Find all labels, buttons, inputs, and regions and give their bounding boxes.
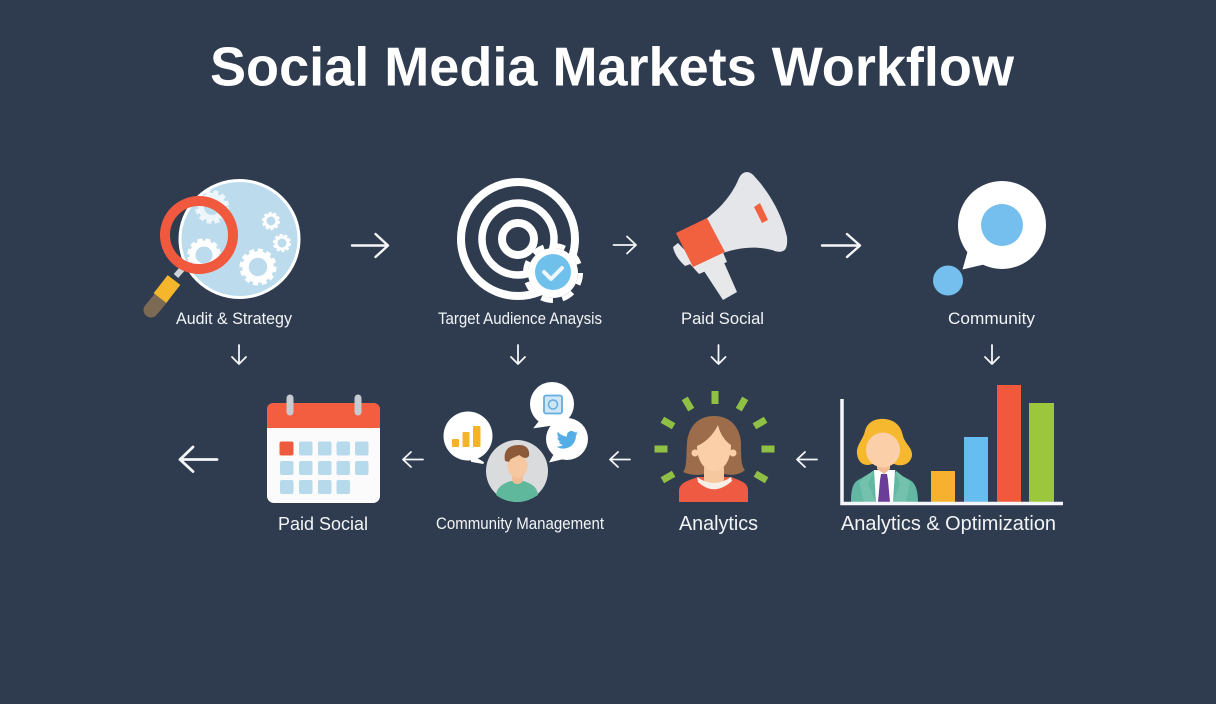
title: Social Media Markets Workflow bbox=[210, 36, 1014, 98]
label: Community bbox=[948, 310, 1036, 328]
label: Paid Social bbox=[681, 310, 764, 328]
icon: magnifying glass bbox=[151, 201, 233, 310]
step: Community bbox=[933, 181, 1046, 328]
arrow left 2 bbox=[403, 452, 423, 467]
label: Target Audience Anaysis bbox=[438, 310, 602, 328]
arrow left 4 bbox=[797, 452, 817, 467]
person: hair bbox=[857, 419, 912, 465]
person: body bbox=[851, 470, 918, 502]
icon: woman avatar bbox=[679, 416, 748, 502]
icon: gear with check bbox=[526, 246, 580, 300]
icon: megaphone bbox=[673, 172, 787, 300]
label: Analytics & Optimization bbox=[841, 513, 1056, 535]
arrow left 3 bbox=[610, 452, 630, 467]
arrow right 1 bbox=[352, 234, 388, 257]
step: Analytics & Optimization bbox=[841, 385, 1063, 535]
icon: target rings bbox=[461, 182, 575, 296]
step: Analytics bbox=[654, 391, 774, 535]
label: Analytics bbox=[679, 513, 758, 535]
axes bbox=[842, 399, 1063, 504]
icon: chart bubble bbox=[444, 412, 492, 463]
bars bbox=[931, 471, 955, 503]
step: Audit & Strategy bbox=[151, 180, 299, 328]
icon: person with bar chart bbox=[842, 385, 1063, 504]
arrow left 1 bbox=[180, 447, 217, 472]
step: Paid Social (calendar) bbox=[267, 394, 380, 534]
label: Community Management bbox=[436, 515, 604, 533]
arrows down bbox=[232, 345, 999, 364]
label: Paid Social bbox=[278, 514, 368, 534]
icon: globe with gears bbox=[180, 180, 299, 298]
step: Paid Social (megaphone) bbox=[673, 172, 787, 328]
arrow right 2 bbox=[614, 236, 636, 254]
icon: twitter bubble bbox=[546, 418, 588, 461]
arrow right 3 bbox=[822, 234, 860, 257]
icon: speech bubble bbox=[933, 181, 1046, 296]
step: Target Audience Analysis bbox=[438, 182, 602, 328]
icon: rays bbox=[654, 391, 774, 483]
label: Audit & Strategy bbox=[176, 310, 293, 328]
icon: person avatar bbox=[486, 440, 548, 502]
step: Community Management bbox=[436, 382, 604, 533]
icon: calendar bbox=[267, 394, 380, 503]
icon: instagram bubble bbox=[530, 382, 574, 427]
